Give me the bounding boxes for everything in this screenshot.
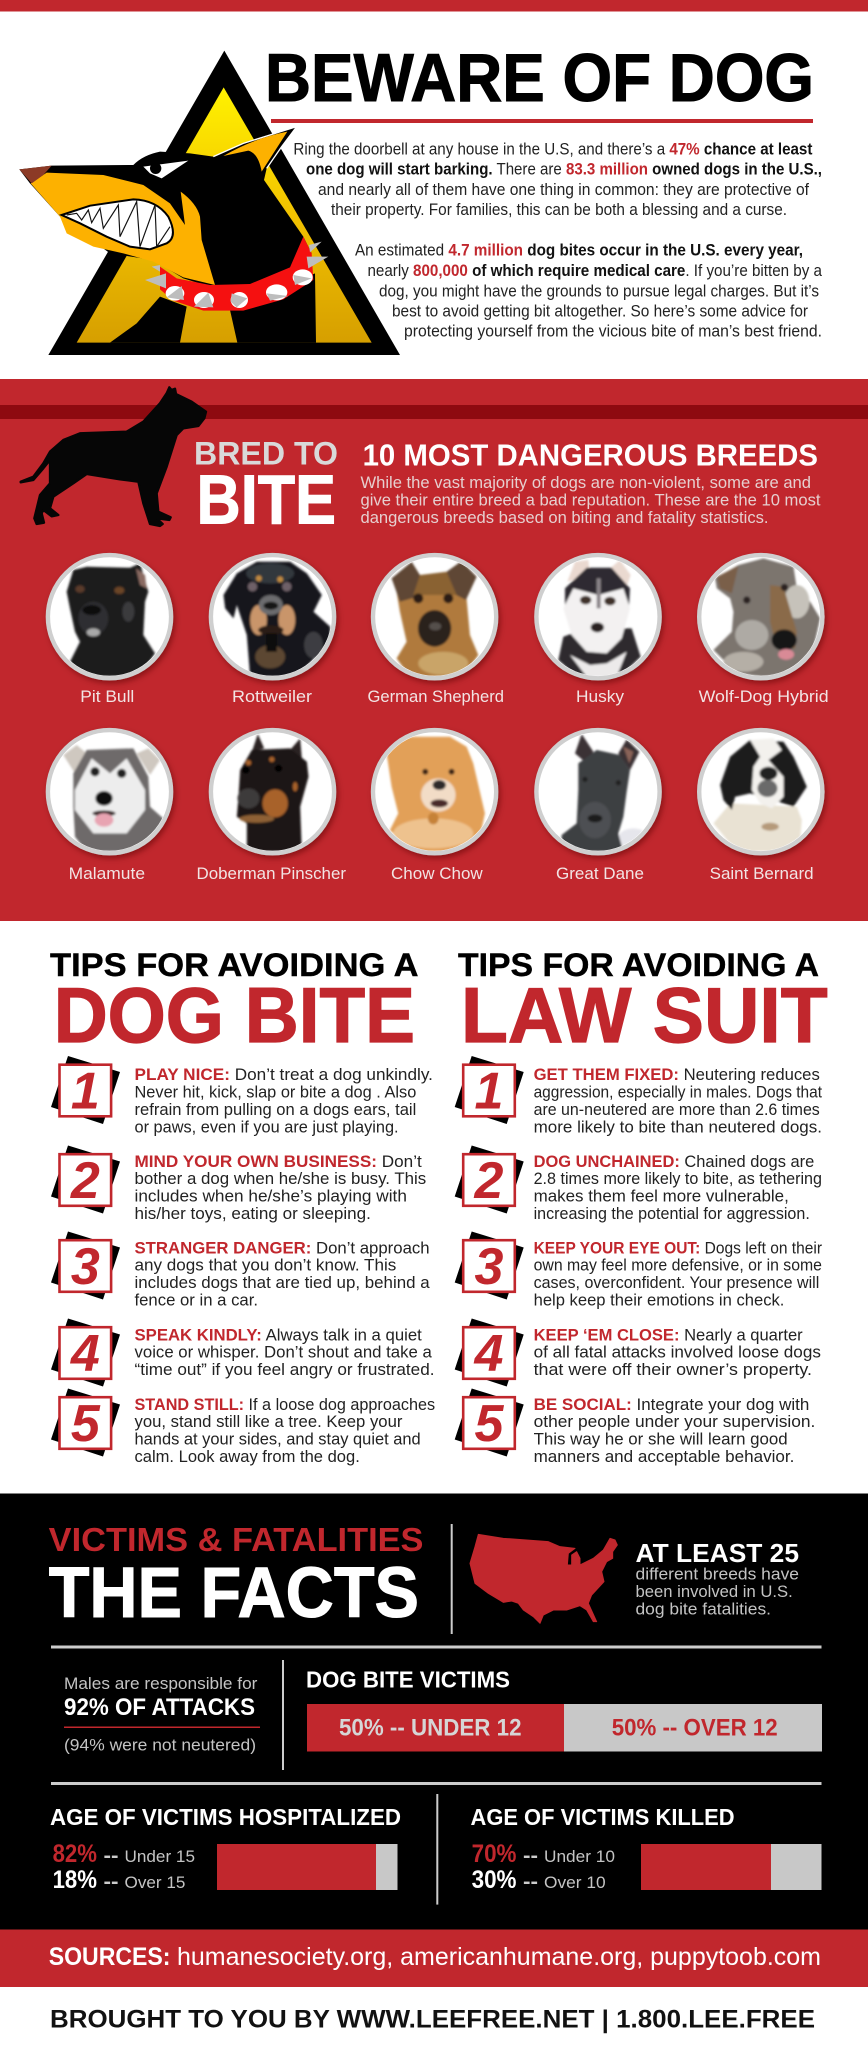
tip 1: aggression, especially in males. Dogs that: [534, 1084, 822, 1102]
icon: number 5: 5: [475, 1395, 505, 1453]
panel: sources: humanesociety.org, americanhumane.org, puppytoob.com: [177, 1943, 821, 1971]
chart: age of victims killed: --: [523, 1845, 538, 1867]
label: Husky: [576, 687, 625, 706]
tip 5: calm. Look away from the dog.: [134, 1448, 360, 1466]
tip 3: includes dogs that are tied up, behind a: [134, 1274, 430, 1292]
text block: intro paragraph 2: nearly 800,000 of which require medical care. If you’re bitten by a: [368, 262, 822, 280]
text block: intro paragraph 2: best to avoid getting bit altogether. So here’s some advice for: [392, 303, 809, 321]
tip 1: are un-neutered are more than 2.6 times: [534, 1101, 820, 1119]
chart: dog bite victims: 50% -- OVER 12: [612, 1714, 778, 1742]
chart: age of victims killed: Under 10: [544, 1847, 615, 1866]
tip 4: SPEAK KINDLY: Always talk in a quiet: [134, 1326, 422, 1344]
tip 3: own may feel more defensive, or in some: [534, 1257, 822, 1275]
tip 5: manners and acceptable behavior.: [534, 1448, 794, 1466]
breed: saint bernard: [699, 730, 822, 853]
icon: number 3: 3: [71, 1238, 100, 1296]
heading: bred to bite: BITE: [196, 461, 336, 539]
text block: intro paragraph 1: one dog will start barking. There are 83.3 million owned dogs in the U.S.,: [306, 161, 822, 179]
icon: dog silhouette: [21, 387, 206, 526]
icon: number 1: 1: [71, 1062, 100, 1120]
icon: number 5: 5: [71, 1395, 101, 1453]
chart: age of victims killed: AGE OF VICTIMS KILLED: [470, 1804, 735, 1830]
tip 3: help keep their emotions in check.: [534, 1292, 784, 1310]
panel: tips for avoiding a dog bite: [50, 947, 435, 1466]
tip 3: cases, overconfident. Your presence will: [534, 1274, 819, 1292]
tip 3: KEEP YOUR EYE OUT: Dogs left on their: [534, 1240, 822, 1258]
tip 5: hands at your sides, and stay quiet and: [134, 1431, 421, 1449]
icon: warning triangle with snarling dog: [19, 51, 400, 355]
heading: bred to bite: [194, 436, 338, 539]
heading: DOG BITE: [54, 971, 415, 1059]
icon: number 2: 2: [474, 1152, 504, 1210]
title: BEWARE OF DOG: [265, 41, 814, 116]
tip 2: includes when he/she’s playing with: [134, 1188, 407, 1206]
tip 3: STRANGER DANGER: Don’t approach: [134, 1240, 430, 1258]
text block: breeds intro: dangerous breeds based on biting and fatality statistics.: [360, 508, 768, 527]
icon: number 1: 1: [475, 1062, 503, 1120]
panel: victims and fatalities: [0, 1494, 868, 1930]
panel: tips for avoiding a law suit: [455, 947, 828, 1466]
chart: age of victims hospitalized: Under 15: [124, 1847, 195, 1866]
label: Chow Chow: [391, 864, 483, 883]
chart: age of victims hospitalized: AGE OF VICTIMS HOSPITALIZED: [50, 1804, 401, 1830]
tip 2: bother a dog when he/she is busy. This: [134, 1170, 426, 1188]
heading: TIPS FOR AVOIDING A: [50, 947, 419, 983]
text block: breeds intro: give their entire breed a bad reputation. These are the 10 most: [360, 491, 821, 510]
tip 3: [455, 1232, 822, 1310]
tip 2: increasing the potential for aggression.: [534, 1205, 810, 1223]
label: Great Dane: [556, 864, 644, 883]
stat: at least 25: been involved in U.S.: [636, 1582, 793, 1601]
tip 5: other people under your supervision.: [534, 1413, 815, 1431]
icon: number 3: [51, 1232, 120, 1300]
icon: number 1: [455, 1056, 524, 1124]
icon: number 2: [51, 1146, 120, 1214]
tip 4: [51, 1318, 434, 1386]
tip 5: [455, 1388, 815, 1466]
tip 5: BE SOCIAL: Integrate your dog with: [534, 1396, 809, 1414]
panel: sources: [0, 1930, 868, 1987]
tip 4: [455, 1318, 821, 1386]
icon: number 4: [51, 1318, 120, 1386]
tip 2: [51, 1146, 426, 1223]
stat: at least 25: different breeds have: [636, 1565, 799, 1584]
footer credit: BROUGHT TO YOU BY WWW.LEEFREE.NET | 1.800.LEE.FREE: [50, 2005, 815, 2033]
tip 4: voice or whisper. Don’t shout and take a: [134, 1344, 433, 1362]
tip 2: MIND YOUR OWN BUSINESS: Don’t: [134, 1153, 422, 1171]
icon: number 4: 4: [474, 1325, 504, 1383]
icon: number 5: [51, 1388, 120, 1456]
tip 3: any dogs that you don’t know. This: [134, 1257, 396, 1275]
chart: age of victims hospitalized: 82%: [53, 1840, 97, 1868]
breed: pit bull: [48, 555, 171, 678]
stat: 92% of attacks: 92% OF ATTACKS: [64, 1694, 255, 1721]
chart: age of victims hospitalized: --: [104, 1871, 118, 1893]
heading: the facts: THE FACTS: [49, 1554, 419, 1633]
icon: number 3: 3: [475, 1238, 504, 1296]
tip 4: that were off their owner’s property.: [534, 1361, 812, 1379]
tip 2: DOG UNCHAINED: Chained dogs are: [534, 1153, 814, 1171]
text block: breeds intro: [360, 473, 821, 527]
text block: breeds intro: While the vast majority of dogs are non-violent, some are and: [360, 473, 811, 492]
label: Pit Bull: [80, 687, 134, 706]
chart: age of victims killed: 30%: [472, 1866, 516, 1894]
tip 2: makes them feel more vulnerable,: [534, 1188, 789, 1206]
icon: number 2: 2: [70, 1152, 100, 1210]
label: Saint Bernard: [710, 864, 814, 883]
stat: at least 25: [636, 1538, 799, 1619]
breed: german shepherd: [373, 555, 496, 678]
chart: dog bite victims: [306, 1666, 822, 1752]
tip 5: [51, 1388, 435, 1466]
icon: number 4: [455, 1318, 524, 1386]
tip 1: [51, 1056, 433, 1136]
breed: doberman pinscher: [211, 730, 334, 853]
chart: age of victims killed: 70%: [472, 1840, 516, 1868]
stat: 92% of attacks: Males are responsible for: [64, 1674, 258, 1693]
tip 2: [455, 1146, 822, 1223]
stat: at least 25: AT LEAST 25: [636, 1538, 799, 1568]
text block: intro paragraph 1: their property. For families, this can be both a blessing and a curse.: [331, 201, 787, 219]
chart: age of victims hospitalized: [50, 1804, 401, 1894]
text block: intro paragraph 2: protecting yourself from the vicious bite of man’s best friend.: [404, 323, 822, 341]
heading: 10 most dangerous breeds: 10 MOST DANGEROUS BREEDS: [363, 439, 818, 473]
breed: rottweiler: [211, 555, 334, 678]
breed: chow chow: [373, 730, 496, 853]
tip 2: his/her toys, eating or sleeping.: [134, 1205, 371, 1223]
chart: age of victims hospitalized: Over 15: [124, 1873, 185, 1892]
stat: 92% of attacks: [64, 1674, 260, 1754]
text block: intro paragraph 2: [355, 242, 822, 341]
text block: intro paragraph 1: [293, 140, 822, 219]
icon: number 5: [455, 1388, 524, 1456]
tip 3: fence or in a car.: [134, 1292, 258, 1310]
panel: bred to bite: [0, 379, 868, 921]
chart: dog bite victims: DOG BITE VICTIMS: [306, 1666, 510, 1692]
tip 2: 2.8 times more likely to bite, as tethering: [534, 1170, 822, 1188]
breed: great dane: [536, 730, 660, 853]
label: Rottweiler: [232, 687, 312, 706]
label: Wolf-Dog Hybrid: [699, 687, 829, 706]
tip 1: Never hit, kick, slap or bite a dog . Also: [134, 1084, 416, 1102]
chart: age of victims killed: [470, 1804, 822, 1894]
icon: number 4: 4: [70, 1325, 100, 1383]
panel: sources: SOURCES:: [49, 1943, 171, 1971]
tip 4: KEEP ‘EM CLOSE: Nearly a quarter: [534, 1326, 803, 1344]
icon: number 1: [51, 1056, 120, 1124]
heading: LAW SUIT: [461, 971, 828, 1059]
tip 4: of all fatal attacks involved loose dogs: [534, 1344, 821, 1362]
text block: intro paragraph 2: An estimated 4.7 million dog bites occur in the U.S. every year,: [355, 242, 803, 260]
tip 4: “time out” if you feel angry or frustrated.: [134, 1361, 434, 1379]
text block: intro paragraph 1: Ring the doorbell at any house in the U.S, and there’s a 47% chance at least: [293, 140, 813, 158]
tip 1: GET THEM FIXED: Neutering reduces: [534, 1066, 820, 1084]
icon: USA map: [470, 1534, 617, 1623]
heading: the facts: VICTIMS & FATALITIES: [49, 1522, 423, 1559]
icon: number 3: [455, 1232, 524, 1300]
tip 1: more likely to bite than neutered dogs.: [534, 1118, 822, 1136]
tip 1: or paws, even if you are just playing.: [134, 1118, 399, 1136]
chart: age of victims killed: --: [523, 1871, 538, 1893]
stat: at least 25: dog bite fatalities.: [636, 1600, 771, 1619]
top red bar: [0, 0, 868, 12]
tip 3: [51, 1232, 430, 1310]
heading: bred to bite: BRED TO: [194, 436, 338, 472]
tip 5: This way he or she will learn good: [534, 1431, 788, 1449]
breed: husky: [536, 555, 660, 678]
chart: dog bite victims: 50% -- UNDER 12: [339, 1714, 522, 1742]
tip 1: [455, 1056, 822, 1136]
chart: age of victims hospitalized: 18%: [53, 1866, 97, 1894]
tip 5: STAND STILL: If a loose dog approaches: [134, 1396, 435, 1414]
label: Malamute: [69, 864, 145, 883]
label: German Shepherd: [368, 687, 504, 706]
tip 5: you, stand still like a tree. Keep your: [134, 1413, 403, 1431]
panel: intro: [19, 41, 822, 355]
tip 1: PLAY NICE: Don’t treat a dog unkindly.: [134, 1066, 433, 1084]
breed: wolf-dog hybrid: [699, 555, 822, 678]
text block: intro paragraph 2: dog, you might have the grounds to pursue legal charges. But it’s: [379, 282, 819, 300]
text block: intro paragraph 1: and nearly all of them have one thing in common: they are protective of: [318, 181, 809, 199]
heading: TIPS FOR AVOIDING A: [458, 947, 819, 983]
label: Doberman Pinscher: [196, 864, 346, 883]
heading: the facts: [49, 1522, 423, 1633]
stat: 92% of attacks: (94% were not neutered): [64, 1736, 256, 1754]
chart: age of victims hospitalized: --: [104, 1845, 118, 1867]
chart: age of victims killed: Over 10: [544, 1873, 606, 1892]
icon: number 2: [455, 1146, 524, 1214]
tip 1: refrain from pulling on a dogs ears, tail: [134, 1101, 416, 1119]
breed: malamute: [48, 730, 171, 853]
title rule: [271, 119, 813, 123]
